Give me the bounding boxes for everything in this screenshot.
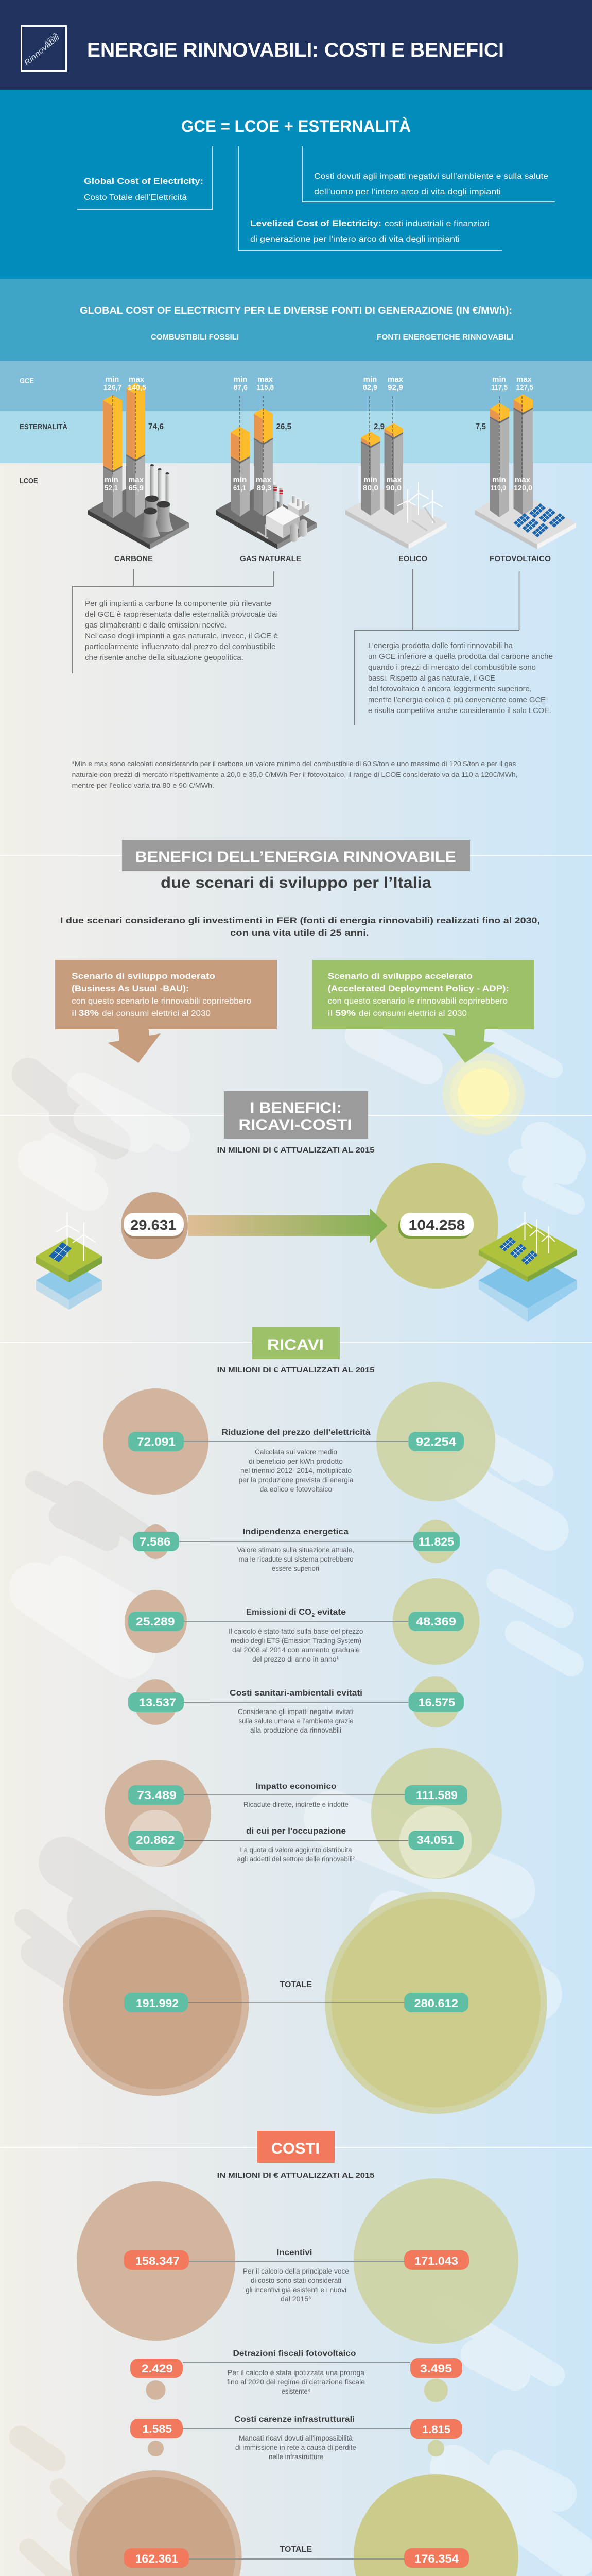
row: totale costi: 176.354 [414, 2552, 459, 2565]
values: GCE fotovoltaico: 117,5 [491, 383, 508, 392]
row: indipendenza energetica: Indipendenza energetica [243, 1528, 349, 1536]
unit label: IN MILIONI DI € ATTUALIZZATI AL 2015 [217, 2171, 375, 2180]
chart title: GLOBAL COST OF ELECTRICITY PER LE DIVERSE FONTI DI GENERAZIONE (IN €/MWh): [80, 305, 512, 316]
row labels [20, 377, 67, 485]
row: totale ricavi: 280.612 [414, 1997, 458, 2010]
background clouds [21, 1036, 574, 2576]
chart: fotovoltaico [475, 375, 576, 563]
description [237, 1846, 355, 1863]
description: alla produzione da rinnovabili [250, 1726, 341, 1734]
section heading: costi: COSTI [271, 2140, 320, 2157]
row: totale ricavi: TOTALE [280, 1980, 312, 1989]
row: impatto economico e occupazione: di cui per l'occupazione [246, 1827, 346, 1836]
chart: gas naturale [216, 375, 317, 563]
panel: scenario moderato: il [72, 1009, 77, 1018]
subtitle: due scenari di sviluppo per l’Italia [161, 874, 431, 891]
description: fino al 2020 del regime di detrazione fiscale [227, 2378, 365, 2386]
row: emissioni di CO2 [125, 1578, 480, 1665]
values: GCE gas: 115,8 [257, 383, 274, 392]
section heading: ricavi: RICAVI [267, 1336, 324, 1353]
callout text rinnovabili [368, 641, 553, 715]
values: LCOE gas [233, 476, 272, 493]
callout text rinnovabili: e risulta competitiva anche considerando il solo LCOE. [368, 706, 551, 715]
description: nelle infrastrutture [269, 2453, 323, 2461]
unit label: IN MILIONI DI € ATTUALIZZATI AL 2015 [217, 1146, 375, 1155]
values: GCE fotovoltaico: min [492, 375, 506, 384]
description: ma le ricadute sul sistema potrebbero [239, 1555, 353, 1563]
panel: scenario accelerato: (Accelerated Deployment Policy - ADP): [328, 984, 509, 993]
row: emissioni di CO2: evitate [317, 1608, 346, 1617]
row: totale costi: TOTALE [280, 2545, 312, 2554]
values: LCOE gas: 61,1 [233, 484, 246, 493]
callout text rinnovabili: del fotovoltaico è ancora leggermente superiore, [368, 685, 532, 693]
row: riduzione del prezzo: 72.091 [137, 1435, 176, 1448]
row: costi sanitari-ambientali: 13.537 [139, 1696, 176, 1709]
value: esternalità gas: 26,5 [276, 422, 291, 431]
row: detrazioni fiscali [130, 2349, 462, 2402]
row: costi sanitari-ambientali [128, 1676, 464, 1734]
description: La quota di valore aggiunto distribuita [240, 1846, 352, 1854]
bubble: ADP saldo [375, 1163, 498, 1289]
arrow: BAU to ADP [188, 1208, 388, 1243]
bubble: BAU saldo: 29.631 [130, 1217, 176, 1233]
value: esternalità carbone: 74,6 [148, 422, 164, 431]
values: GCE fotovoltaico: max [516, 375, 532, 384]
row labels: GCE [20, 377, 34, 385]
description [227, 2369, 365, 2395]
definition: Levelized Cost of Electricity [250, 218, 490, 244]
icon: large island [479, 1212, 577, 1322]
bar: gas min [231, 427, 250, 517]
row: costi sanitari-ambientali: Costi sanitari-ambientali evitati [230, 1689, 362, 1698]
footnote: min e max: mentre per l’eolico varia tra 80 e 90 €/MWh. [72, 782, 214, 789]
unit label: IN MILIONI DI € ATTUALIZZATI AL 2015 [217, 1366, 375, 1375]
values: LCOE carbone [105, 476, 144, 493]
description: medio degli ETS (Emission Trading System) [231, 1637, 361, 1645]
title: ENERGIE RINNOVABILI: COSTI E BENEFICI [87, 39, 504, 61]
values: LCOE carbone: 52,1 [105, 484, 118, 493]
intro text: I due scenari considerano gli investimenti in FER (fonti di energia rinnovabili) realizzati fino al 2030, [60, 916, 540, 925]
row: incentivi [77, 2178, 518, 2344]
row band: GCE [0, 361, 592, 411]
value: esternalità fotovoltaico: 7,5 [476, 422, 486, 431]
description: dal 2015³ [281, 2295, 311, 2303]
description: di costo sono stati considerati [251, 2277, 341, 2284]
row: carenze infrastrutturali [130, 2415, 462, 2461]
bar: eolico max [384, 423, 403, 515]
panel: scenario moderato [55, 960, 277, 1063]
panel: scenario accelerato: Scenario di sviluppo accelerato [328, 971, 473, 981]
intro text [60, 916, 540, 938]
row: costi sanitari-ambientali: 16.575 [419, 1696, 455, 1709]
values: GCE fotovoltaico [491, 375, 533, 392]
description: esistente⁴ [282, 2387, 310, 2395]
callout text rinnovabili: L’energia prodotta dalle fonti rinnovabili ha [368, 641, 513, 650]
values: LCOE fotovoltaico: max [515, 476, 531, 484]
icon: centrale a carbone [141, 464, 173, 538]
values: LCOE gas: min [233, 476, 247, 484]
chart: carbone [88, 375, 189, 563]
panel: scenario accelerato: dei consumi elettrici al 2030 [359, 1009, 467, 1018]
row: emissioni di CO2: 25.289 [136, 1615, 175, 1628]
values: LCOE fotovoltaico: min [492, 476, 506, 484]
icon: centrale a gas [257, 485, 309, 542]
row: incentivi: 158.347 [135, 2255, 180, 2267]
bar: fotovoltaico max [514, 394, 533, 515]
values: GCE eolico: 92,9 [388, 383, 403, 392]
callout text fossili: Nel caso degli impianti a gas naturale, invece, il GCE è [85, 632, 278, 640]
definition: Global Cost of Electricity [84, 176, 203, 202]
section heading: i benefici ricavi-costi: RICAVI-COSTI [239, 1116, 352, 1133]
values: GCE eolico [363, 375, 404, 392]
bar: gas max [254, 408, 273, 516]
description: del prezzo di anno in anno¹ [252, 1655, 339, 1663]
values: LCOE carbone: min [105, 476, 118, 484]
formula heading: GCE = LCOE + ESTERNALITÀ [181, 117, 411, 135]
description: Considerano gli impatti negativi evitati [238, 1708, 353, 1716]
row: riduzione del prezzo: Riduzione del prezzo dell'elettricità [221, 1428, 371, 1437]
callout text fossili: che risente anche della situazione geopolitica. [85, 653, 243, 662]
icon: sun [442, 1053, 525, 1135]
values: LCOE eolico: min [363, 476, 377, 484]
bar: eolico min [361, 432, 380, 516]
panel: GCE formula [0, 90, 592, 279]
description: Il calcolo è stato fatto sulla base del prezzo [229, 1628, 363, 1635]
panel: scenario moderato: (Business As Usual -BAU): [72, 984, 189, 993]
values: LCOE eolico: 80,0 [363, 484, 378, 493]
values: GCE eolico: min [363, 375, 377, 384]
callout text fossili: Per gli impianti a carbone la componente più rilevante [85, 599, 271, 608]
row: totale ricavi: 191.992 [136, 1997, 179, 2010]
footnote: min e max [72, 760, 517, 789]
row: totale costi: 162.361 [135, 2552, 178, 2565]
row: impatto economico e occupazione: 73.489 [137, 1789, 177, 1802]
description: essere superiori [272, 1565, 319, 1572]
platform [216, 488, 317, 549]
definition: esternalità: Costi dovuti agli impatti negativi sull’ambiente e sulla salute [314, 172, 548, 181]
bar: carbone min [103, 395, 123, 518]
group heading: fossili: COMBUSTIBILI FOSSILI [151, 333, 239, 342]
row labels: ESTERNALITÀ [20, 422, 67, 431]
row: detrazioni fiscali: 2.429 [142, 2362, 173, 2375]
section heading: ricavi [0, 1327, 592, 1359]
bubble: ADP saldo: 104.258 [409, 1217, 465, 1233]
description: Per il calcolo della principale voce [243, 2267, 349, 2275]
row labels: LCOE [20, 477, 38, 485]
values: GCE carbone: 126,7 [103, 383, 121, 392]
description: Per il calcolo è stata ipotizzata una proroga [228, 2369, 364, 2377]
section heading: costi [0, 2131, 592, 2163]
values: LCOE eolico: max [386, 476, 402, 484]
panel: scenario accelerato: con questo scenario le rinnovabili coprirebbero [328, 997, 508, 1006]
description [239, 1448, 354, 1493]
values: GCE gas: max [257, 375, 273, 384]
row: incentivi: Incentivi [277, 2248, 312, 2257]
description [229, 1628, 363, 1663]
callout text rinnovabili: mentre l’energia eolica è più conveniente come GCE [368, 696, 546, 704]
row: carenze infrastrutturali: Costi carenze infrastrutturali [234, 2415, 355, 2424]
intro text: con una vita utile di 25 anni. [230, 928, 369, 938]
row: riduzione del prezzo: 92.254 [416, 1435, 457, 1448]
values: LCOE eolico [363, 476, 402, 493]
description [237, 1546, 354, 1572]
panel: scenario accelerato: il [328, 1009, 333, 1018]
values: LCOE gas: max [256, 476, 272, 484]
row: detrazioni fiscali: Detrazioni fiscali fotovoltaico [233, 2349, 356, 2358]
platform [345, 488, 447, 549]
row: impatto economico e occupazione: 20.862 [136, 1834, 175, 1846]
description: di beneficio per kWh prodotto [249, 1458, 343, 1465]
row: riduzione del prezzo [103, 1382, 495, 1501]
callout text rinnovabili: bassi. Rispetto al gas naturale, il GCE [368, 674, 495, 683]
callout text fossili: del GCE è rappresentata dalle esternalità provocate dai [85, 610, 278, 619]
icon: pannelli solari [514, 503, 565, 537]
row: indipendenza energetica [133, 1520, 460, 1572]
row: impatto economico e occupazione [105, 1748, 502, 1879]
chart: eolico [345, 375, 447, 563]
row: incentivi: 171.043 [414, 2255, 458, 2267]
values: LCOE gas: 89,3 [257, 484, 271, 493]
description: sulla salute umana e l’ambiente grazie [239, 1717, 353, 1725]
row: emissioni di CO2: 2 [312, 1613, 315, 1618]
icon: turbine eoliche [397, 482, 443, 531]
definition: esternalità [314, 172, 548, 196]
row: totale ricavi [63, 1892, 547, 2114]
row: impatto economico e occupazione: 34.051 [417, 1834, 454, 1846]
logo: AssoRinnovabili: ASSO [43, 32, 58, 46]
source label: carbone: CARBONE [114, 554, 153, 563]
definition: esternalità: dell’uomo per l’intero arco di vita degli impianti [314, 188, 501, 196]
values: GCE fotovoltaico: 127,5 [516, 383, 533, 392]
values: GCE gas [234, 375, 274, 392]
bar: fotovoltaico min [490, 403, 509, 517]
description: per la produzione prevista di energia [239, 1476, 354, 1484]
callout text fossili: gas climalteranti e dalle emissioni nocive. [85, 621, 227, 630]
section heading: benefici [0, 840, 592, 871]
values: GCE eolico: max [388, 375, 404, 384]
source label: gas naturale: GAS NATURALE [240, 554, 301, 563]
values: LCOE fotovoltaico [491, 476, 532, 493]
row: totale costi [70, 2470, 518, 2576]
callout text rinnovabili: quando i prezzi di mercato del combustibile sono [368, 663, 536, 672]
values: GCE eolico: 82,9 [363, 383, 377, 392]
description [243, 2267, 349, 2303]
icon: small island [36, 1212, 102, 1310]
callout: fossili [73, 569, 278, 673]
section heading: i benefici ricavi-costi: I BENEFICI: [250, 1099, 342, 1116]
values: LCOE fotovoltaico: 110,0 [491, 484, 506, 493]
description: di immissione in rete a causa di perdite [235, 2444, 356, 2451]
values: LCOE eolico: 90,0 [386, 484, 402, 493]
description: Valore stimato sulla situazione attuale, [237, 1546, 354, 1554]
bar: carbone max [126, 383, 145, 518]
logo: AssoRinnovabili [22, 26, 66, 71]
row: impatto economico e occupazione: Ricadute dirette, indirette e indotte [243, 1801, 349, 1808]
row: detrazioni fiscali: 3.495 [420, 2362, 452, 2375]
values: GCE carbone: max [129, 375, 145, 384]
description: da eolico e fotovoltaico [260, 1485, 332, 1493]
panel: chart heading band [0, 279, 592, 361]
callout text fossili [85, 599, 278, 662]
section heading: i benefici ricavi-costi [0, 1091, 592, 1139]
row: carenze infrastrutturali: 1.815 [422, 2423, 450, 2436]
callout text rinnovabili: un GCE inferiore a quella prodotta dal carbone anche [368, 652, 553, 661]
callout text fossili: particolarmente influenzato dal prezzo del combustibile [85, 642, 276, 651]
description: Calcolata sul valore medio [255, 1448, 337, 1456]
description: dal 2008 al 2014 con aumento graduale [232, 1646, 360, 1654]
values: GCE carbone [103, 375, 146, 392]
values: LCOE fotovoltaico: 120,0 [514, 484, 532, 493]
values: GCE carbone: 140,5 [128, 383, 146, 392]
description [238, 1708, 353, 1734]
description: gli incentivi già esistenti e i nuovi [246, 2286, 346, 2294]
value: esternalità eolico: 2,9 [374, 422, 385, 431]
panel: scenario accelerato [312, 960, 534, 1063]
values: GCE carbone: min [106, 375, 119, 384]
row: emissioni di CO2: Emissioni di CO [246, 1608, 311, 1617]
definition: Global Cost of Electricity: Costo Totale dell’Elettricità [84, 193, 187, 202]
description: nel triennio 2012- 2014, moltiplicato [240, 1467, 352, 1475]
description: agli addetti del settore delle rinnovabili² [237, 1855, 355, 1863]
panel: scenario accelerato: 59% [335, 1008, 356, 1018]
group heading: rinnovabili: FONTI ENERGETICHE RINNOVABILI [377, 333, 513, 342]
footnote: min e max: *Min e max sono calcolati considerando per il carbone un valore minimo del combustibile di 60 $/ton e uno massimo di 120 $/ton e per il gas [72, 760, 516, 768]
source label: eolico: EOLICO [398, 554, 427, 563]
callout: rinnovabili [355, 569, 553, 725]
values: GCE gas: min [234, 375, 247, 384]
row: carenze infrastrutturali: 1.585 [142, 2422, 172, 2435]
panel: scenario moderato: con questo scenario le rinnovabili coprirebbero [72, 997, 251, 1006]
row: emissioni di CO2: 48.369 [416, 1615, 456, 1628]
panel: scenario moderato: 38% [78, 1008, 99, 1018]
bubble: BAU saldo [121, 1192, 188, 1259]
section heading: benefici: BENEFICI DELL’ENERGIA RINNOVABILE [135, 849, 456, 866]
platform [475, 488, 576, 549]
definition: Levelized Cost of Electricity: di generazione per l'intero arco di vita degli impianti [250, 235, 460, 244]
definition: Levelized Cost of Electricity: Levelized Cost of Electricity: [250, 218, 381, 228]
panel: scenario moderato: dei consumi elettrici al 2030 [102, 1009, 211, 1018]
row: indipendenza energetica: 7.586 [140, 1535, 171, 1548]
row: impatto economico e occupazione: Impatto economico [255, 1782, 337, 1791]
source label: fotovoltaico: FOTOVOLTAICO [490, 554, 551, 563]
description: Mancati ricavi dovuti all’impossibilità [239, 2434, 353, 2442]
logo: AssoRinnovabili: Rinnovabili [23, 33, 62, 67]
panel: scenario moderato: Scenario di sviluppo moderato [72, 971, 215, 981]
row band: esternalità [0, 411, 592, 463]
definition: Global Cost of Electricity: Global Cost of Electricity: [84, 176, 203, 186]
row: indipendenza energetica: 11.825 [419, 1535, 454, 1548]
values: GCE gas: 87,6 [234, 383, 248, 392]
description [235, 2434, 356, 2461]
values: LCOE carbone: 65,9 [129, 484, 144, 493]
footnote: min e max: naturale con prezzi di mercato rispettivamente a 20,0 e 35,0 €/MWh Per il fotovoltaico, il range di LCOE considerato va da 110 a 120€/MWh, [72, 771, 517, 778]
header band [0, 0, 592, 90]
row: impatto economico e occupazione: 111.589 [416, 1789, 458, 1802]
values: LCOE carbone: max [128, 476, 144, 484]
platform [88, 488, 189, 549]
definition: Levelized Cost of Electricity: costi industriali e finanziari [385, 219, 490, 228]
